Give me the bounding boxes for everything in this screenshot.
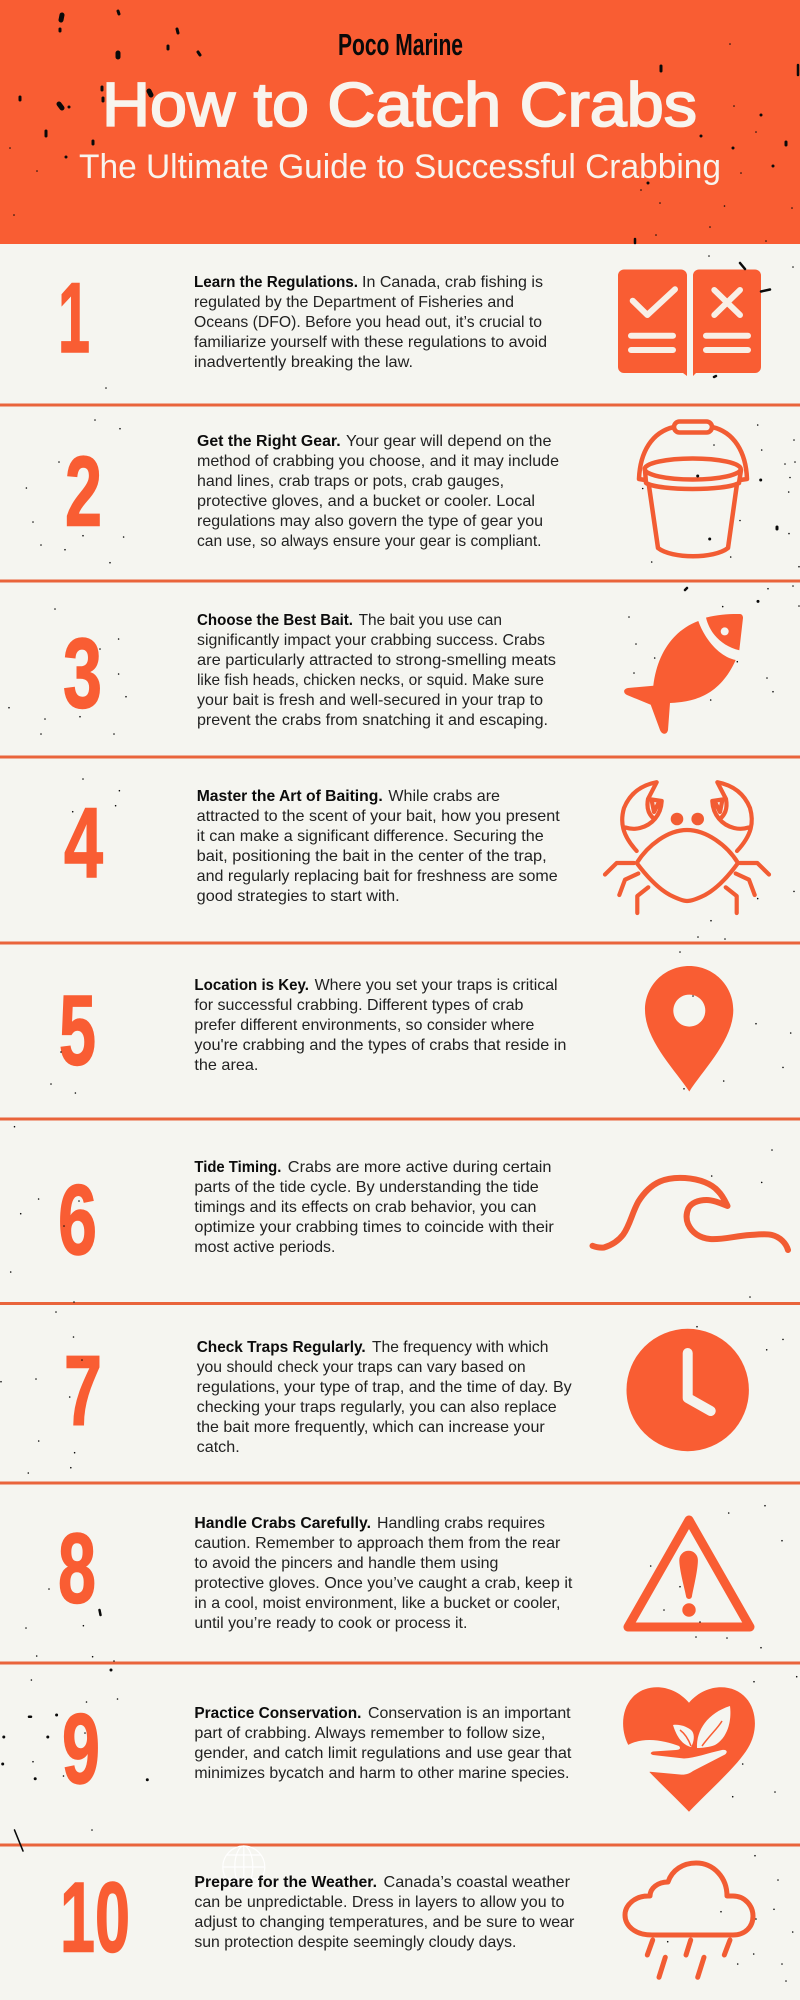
step 2 text: can use, so always ensure your gear is compliant. xyxy=(197,533,542,550)
step 8 text: protective gloves. Once you’ve caught a crab, keep it xyxy=(194,1575,573,1592)
faint globe mark xyxy=(223,1846,265,1888)
step 4 text: and regularly replacing bait for freshness are some xyxy=(197,868,558,885)
step 5 text: the area. xyxy=(194,1057,258,1074)
panel: step 10 xyxy=(60,1846,753,1977)
icon: warning triangle xyxy=(628,1520,750,1627)
step 10 text: sun protection despite seemingly cloudy days. xyxy=(194,1934,516,1951)
step 3 text: prevent the crabs from snatching it and escaping. xyxy=(197,712,548,729)
panel: step 4 xyxy=(64,782,769,913)
panel: step 9 xyxy=(62,1687,755,1812)
step 2 text: hand lines, crab traps or pots, crab gauges, xyxy=(197,473,504,490)
step 2 text: method of crabbing you choose, and it may include xyxy=(197,453,559,470)
step 4 text: good strategies to start with. xyxy=(197,888,400,905)
number 9: 9 xyxy=(62,1693,100,1804)
step 6 text xyxy=(194,1159,554,1256)
step 10 text: adjust to changing temperatures, and be sure to wear xyxy=(194,1914,575,1931)
icon: heart with hand and leaves xyxy=(600,1687,755,1812)
step 1 text: inadvertently breaking the law. xyxy=(194,354,413,371)
icon: clock xyxy=(626,1329,749,1451)
step 4 text: attracted to the scent of your bait, how you present xyxy=(197,808,560,825)
step 5 text: you're crabbing and the types of crabs that reside in xyxy=(194,1037,566,1054)
step 5 text: for successful crabbing. Different types of crab xyxy=(194,997,524,1014)
step 1 text xyxy=(194,274,547,371)
step 9 text: gender, and catch limit regulations and use gear that xyxy=(194,1745,572,1762)
icon: rain cloud xyxy=(625,1863,753,1977)
step 10 text: Prepare for the Weather. xyxy=(194,1874,377,1891)
step 9 text: minimizes bycatch and harm to other marine species. xyxy=(194,1765,569,1782)
step 7 text: The frequency with which xyxy=(372,1339,548,1356)
step 6 text: Crabs are more active during certain xyxy=(288,1159,552,1176)
step 7 text: Check Traps Regularly. xyxy=(197,1339,366,1356)
step 1 text: regulated by the Department of Fisheries and xyxy=(194,294,514,311)
title: How to Catch Crabs xyxy=(102,71,697,140)
step 4 text: While crabs are xyxy=(388,788,500,805)
step 3 text: like fish heads, chicken necks, or squid. Make sure xyxy=(197,672,544,689)
number 2: 2 xyxy=(65,436,102,546)
step 3 text: significantly impact your crabbing success. Crabs xyxy=(197,632,545,649)
icon: bucket xyxy=(639,422,747,556)
step 2 text: protective gloves, and a bucket or cooler. Local xyxy=(197,493,535,510)
step 9 text: part of crabbing. Always remember to follow size, xyxy=(194,1725,545,1742)
step 10 text xyxy=(194,1874,575,1951)
number 4: 4 xyxy=(64,787,103,898)
number 1: 1 xyxy=(58,262,90,373)
panel: step 3 xyxy=(63,612,743,734)
step 7 text xyxy=(197,1339,572,1456)
step 10 text: can be unpredictable. Dress in layers to allow you to xyxy=(194,1894,564,1911)
brand name: Poco Marine xyxy=(338,27,463,62)
icon: fish xyxy=(624,614,743,734)
step 2 text: Get the Right Gear. xyxy=(197,433,341,450)
step 8 text: until you’re ready to cook or process it. xyxy=(194,1615,467,1632)
panel: step 6 xyxy=(58,1159,788,1275)
step 8 text: in a cool, moist environment, like a bucket or cooler, xyxy=(194,1595,560,1612)
step 7 text: checking your traps regularly, you can also replace xyxy=(197,1399,557,1416)
step 6 text: parts of the tide cycle. By understanding the tide xyxy=(194,1179,539,1196)
panel: step 5 xyxy=(59,966,733,1092)
number 10: 10 xyxy=(60,1862,130,1972)
step 9 text xyxy=(194,1705,572,1782)
icon: wave xyxy=(592,1178,788,1250)
step 4 text: it can make a significant difference. Securing the xyxy=(197,828,544,845)
subtitle: The Ultimate Guide to Successful Crabbing xyxy=(79,148,721,186)
step 2 text: Your gear will depend on the xyxy=(346,433,552,450)
number 6: 6 xyxy=(58,1164,97,1275)
step 4 text: Master the Art of Baiting. xyxy=(197,788,383,805)
step 7 text: catch. xyxy=(197,1439,240,1456)
panel: step 8 xyxy=(58,1512,750,1632)
step 1 text: In Canada, crab fishing is xyxy=(362,274,543,291)
step 2 text: regulations may also govern the type of gear you xyxy=(197,513,543,530)
step 2 text xyxy=(197,433,559,550)
icon: crab xyxy=(605,782,769,913)
step 4 text xyxy=(197,788,560,905)
step 5 text: Where you set your traps is critical xyxy=(315,977,558,994)
step 3 text: your bait is fresh and well-secured in your trap to xyxy=(197,692,543,709)
step 9 text: Practice Conservation. xyxy=(194,1705,361,1722)
step 5 text: prefer different environments, so consider where xyxy=(194,1017,534,1034)
number 3: 3 xyxy=(63,618,102,728)
step 3 text xyxy=(197,612,556,729)
step 8 text: Handling crabs requires xyxy=(377,1515,545,1532)
number 5: 5 xyxy=(59,974,96,1086)
step 6 text: most active periods. xyxy=(194,1239,335,1256)
step 3 text: The bait you use can xyxy=(359,612,502,629)
step 1 text: Learn the Regulations. xyxy=(194,274,358,291)
header banner xyxy=(0,0,800,244)
step 8 text: Handle Crabs Carefully. xyxy=(194,1515,371,1532)
step 1 text: familiarize yourself with these regulations to avoid xyxy=(194,334,547,351)
panel: step 2 xyxy=(65,422,747,556)
step 9 text: Conservation is an important xyxy=(368,1705,571,1722)
step 3 text: are particularly attracted to strong-smelling meats xyxy=(197,652,556,669)
step 7 text: the bait more frequently, which can increase your xyxy=(197,1419,545,1436)
step 10 text: Canada’s coastal weather xyxy=(384,1874,571,1891)
icon: open rule book xyxy=(618,270,761,376)
icon: map pin xyxy=(645,966,733,1092)
step 8 text xyxy=(194,1515,573,1632)
step 5 text: Location is Key. xyxy=(194,977,309,994)
step 6 text: Tide Timing. xyxy=(194,1159,281,1176)
step 8 text: to avoid the pincers and handle them using xyxy=(194,1555,498,1572)
step 6 text: optimize your crabbing times to coincide with their xyxy=(194,1219,554,1236)
step 7 text: regulations, your type of trap, and the time of day. By xyxy=(197,1379,572,1396)
step 1 text: Oceans (DFO). Before you head out, it’s crucial to xyxy=(194,314,542,331)
panel: step 7 xyxy=(64,1329,749,1456)
step 5 text xyxy=(194,977,566,1074)
step 3 text: Choose the Best Bait. xyxy=(197,612,353,629)
number 8: 8 xyxy=(58,1512,96,1624)
step 4 text: bait, positioning the bait in the center of the trap, xyxy=(197,848,547,865)
panel: step 1 xyxy=(58,262,761,376)
step 7 text: you should check your traps can vary based on xyxy=(197,1359,526,1376)
number 7: 7 xyxy=(64,1334,102,1446)
step 8 text: caution. Remember to approach them from the rear xyxy=(194,1535,561,1552)
step 6 text: timings and its effects on crab behavior, you can xyxy=(194,1199,536,1216)
